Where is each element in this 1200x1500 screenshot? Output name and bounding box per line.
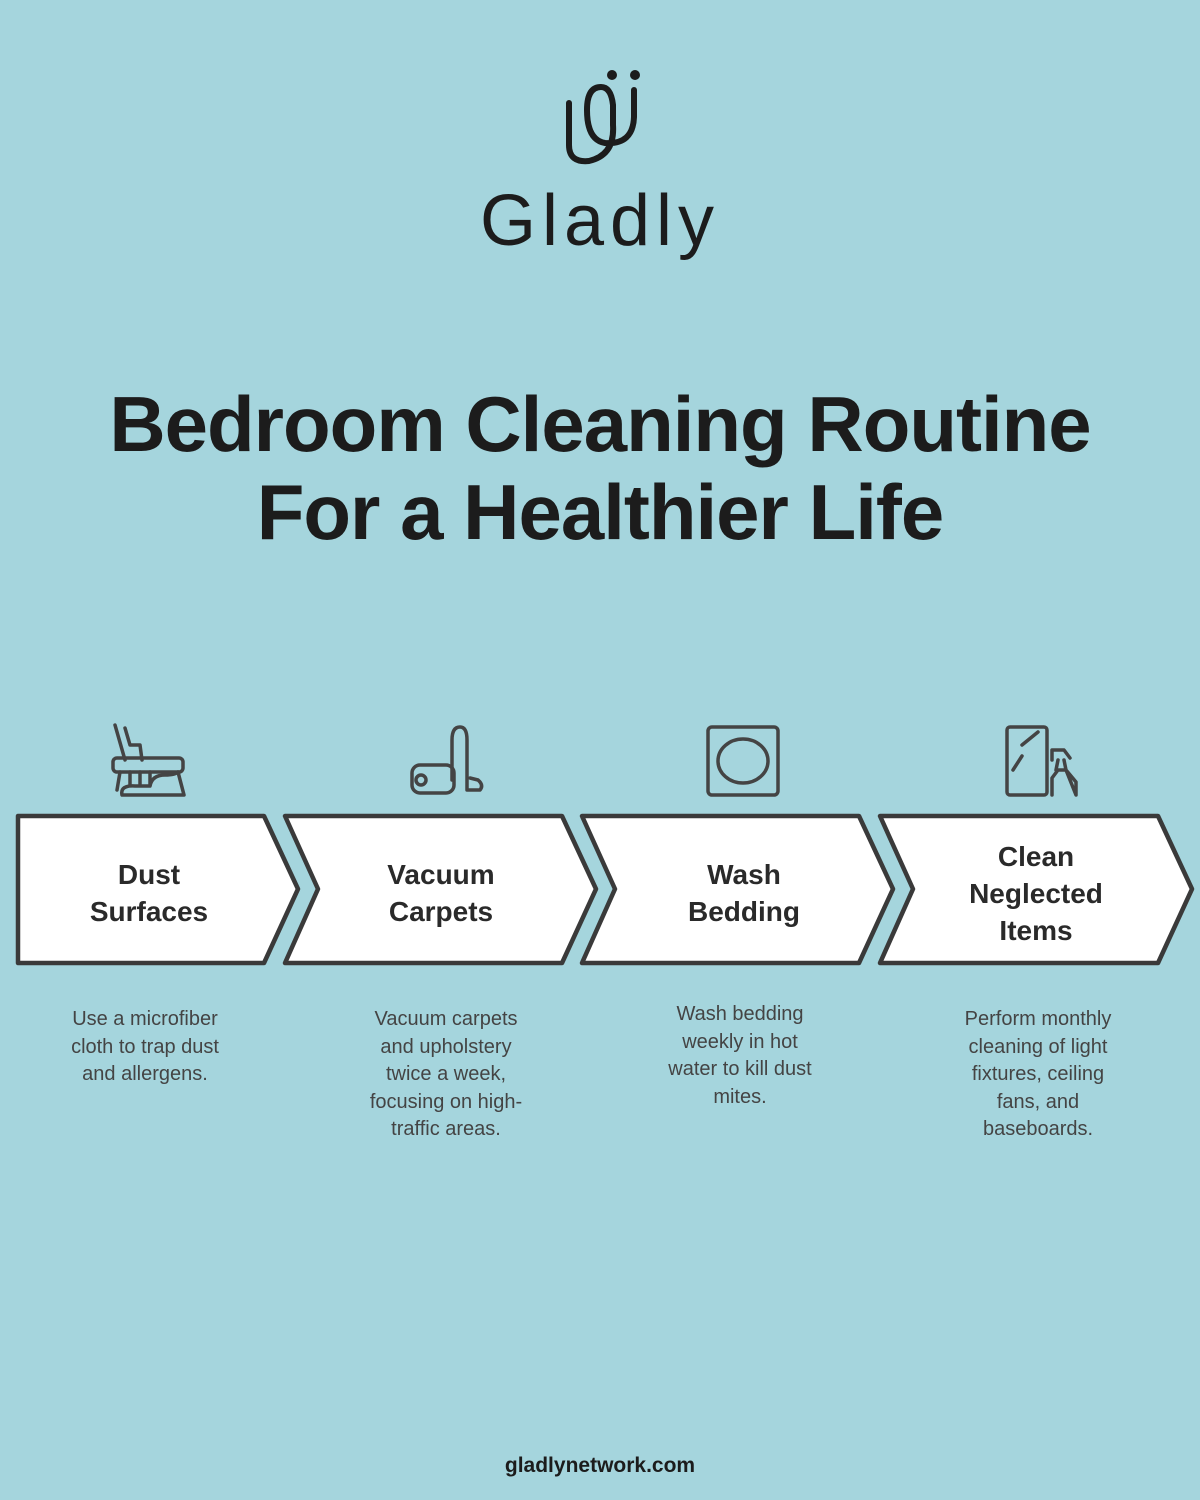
logo text: Gladly [480,181,720,261]
desc 1: cloth to trap dust [71,1036,219,1058]
logo icon [566,70,640,164]
desc 4: fixtures, ceiling [972,1063,1104,1085]
desc 4: Perform monthly [965,1008,1111,1030]
desc 3: weekly in hot [682,1030,798,1052]
label 4: Clean [998,841,1074,872]
label 2 [387,859,495,927]
desc 2: Vacuum carpets [374,1008,518,1030]
chevron 3 [582,816,893,963]
desc 3: water to kill dust [668,1058,812,1080]
desc 1: Use a microfiber [72,1008,218,1030]
label 4 [969,841,1103,946]
desc 2: and upholstery [380,1036,512,1058]
label 1: Surfaces [90,896,208,927]
title: For a Healthier Life [257,468,943,556]
desc 2: focusing on high- [370,1090,522,1112]
desc 2: twice a week, [386,1063,506,1085]
title: Bedroom Cleaning Routine [109,380,1091,468]
title [109,380,1091,556]
icon: mirror spray [1007,727,1076,795]
icon: washer [708,727,778,795]
desc 3 [668,1003,812,1108]
label 4: Neglected [969,878,1103,909]
desc 4: fans, and [997,1090,1079,1112]
label 2: Vacuum [387,859,495,890]
label 1: Dust [118,859,180,890]
label 1 [90,859,208,927]
desc 4: cleaning of light [968,1036,1107,1058]
desc 4 [965,1008,1112,1140]
desc 1: and allergens. [82,1063,208,1085]
label 3: Bedding [688,896,800,927]
chevron 4 [880,816,1192,963]
icons [111,723,1078,797]
chevron 1 [18,816,298,963]
desc 3: mites. [713,1086,767,1108]
label 3: Wash [707,859,781,890]
desc 3: Wash bedding [676,1003,804,1025]
footer url: gladlynetwork.com [505,1454,695,1477]
icon: vacuum [412,727,482,793]
icon: duster [113,725,184,795]
desc 1 [71,1008,219,1085]
desc 2 [370,1008,522,1140]
desc 2: traffic areas. [391,1118,501,1140]
label 2: Carpets [389,896,493,927]
chevron 2 [285,816,596,963]
label 3 [688,859,800,927]
desc 4: baseboards. [983,1118,1093,1140]
label 4: Items [999,915,1073,946]
